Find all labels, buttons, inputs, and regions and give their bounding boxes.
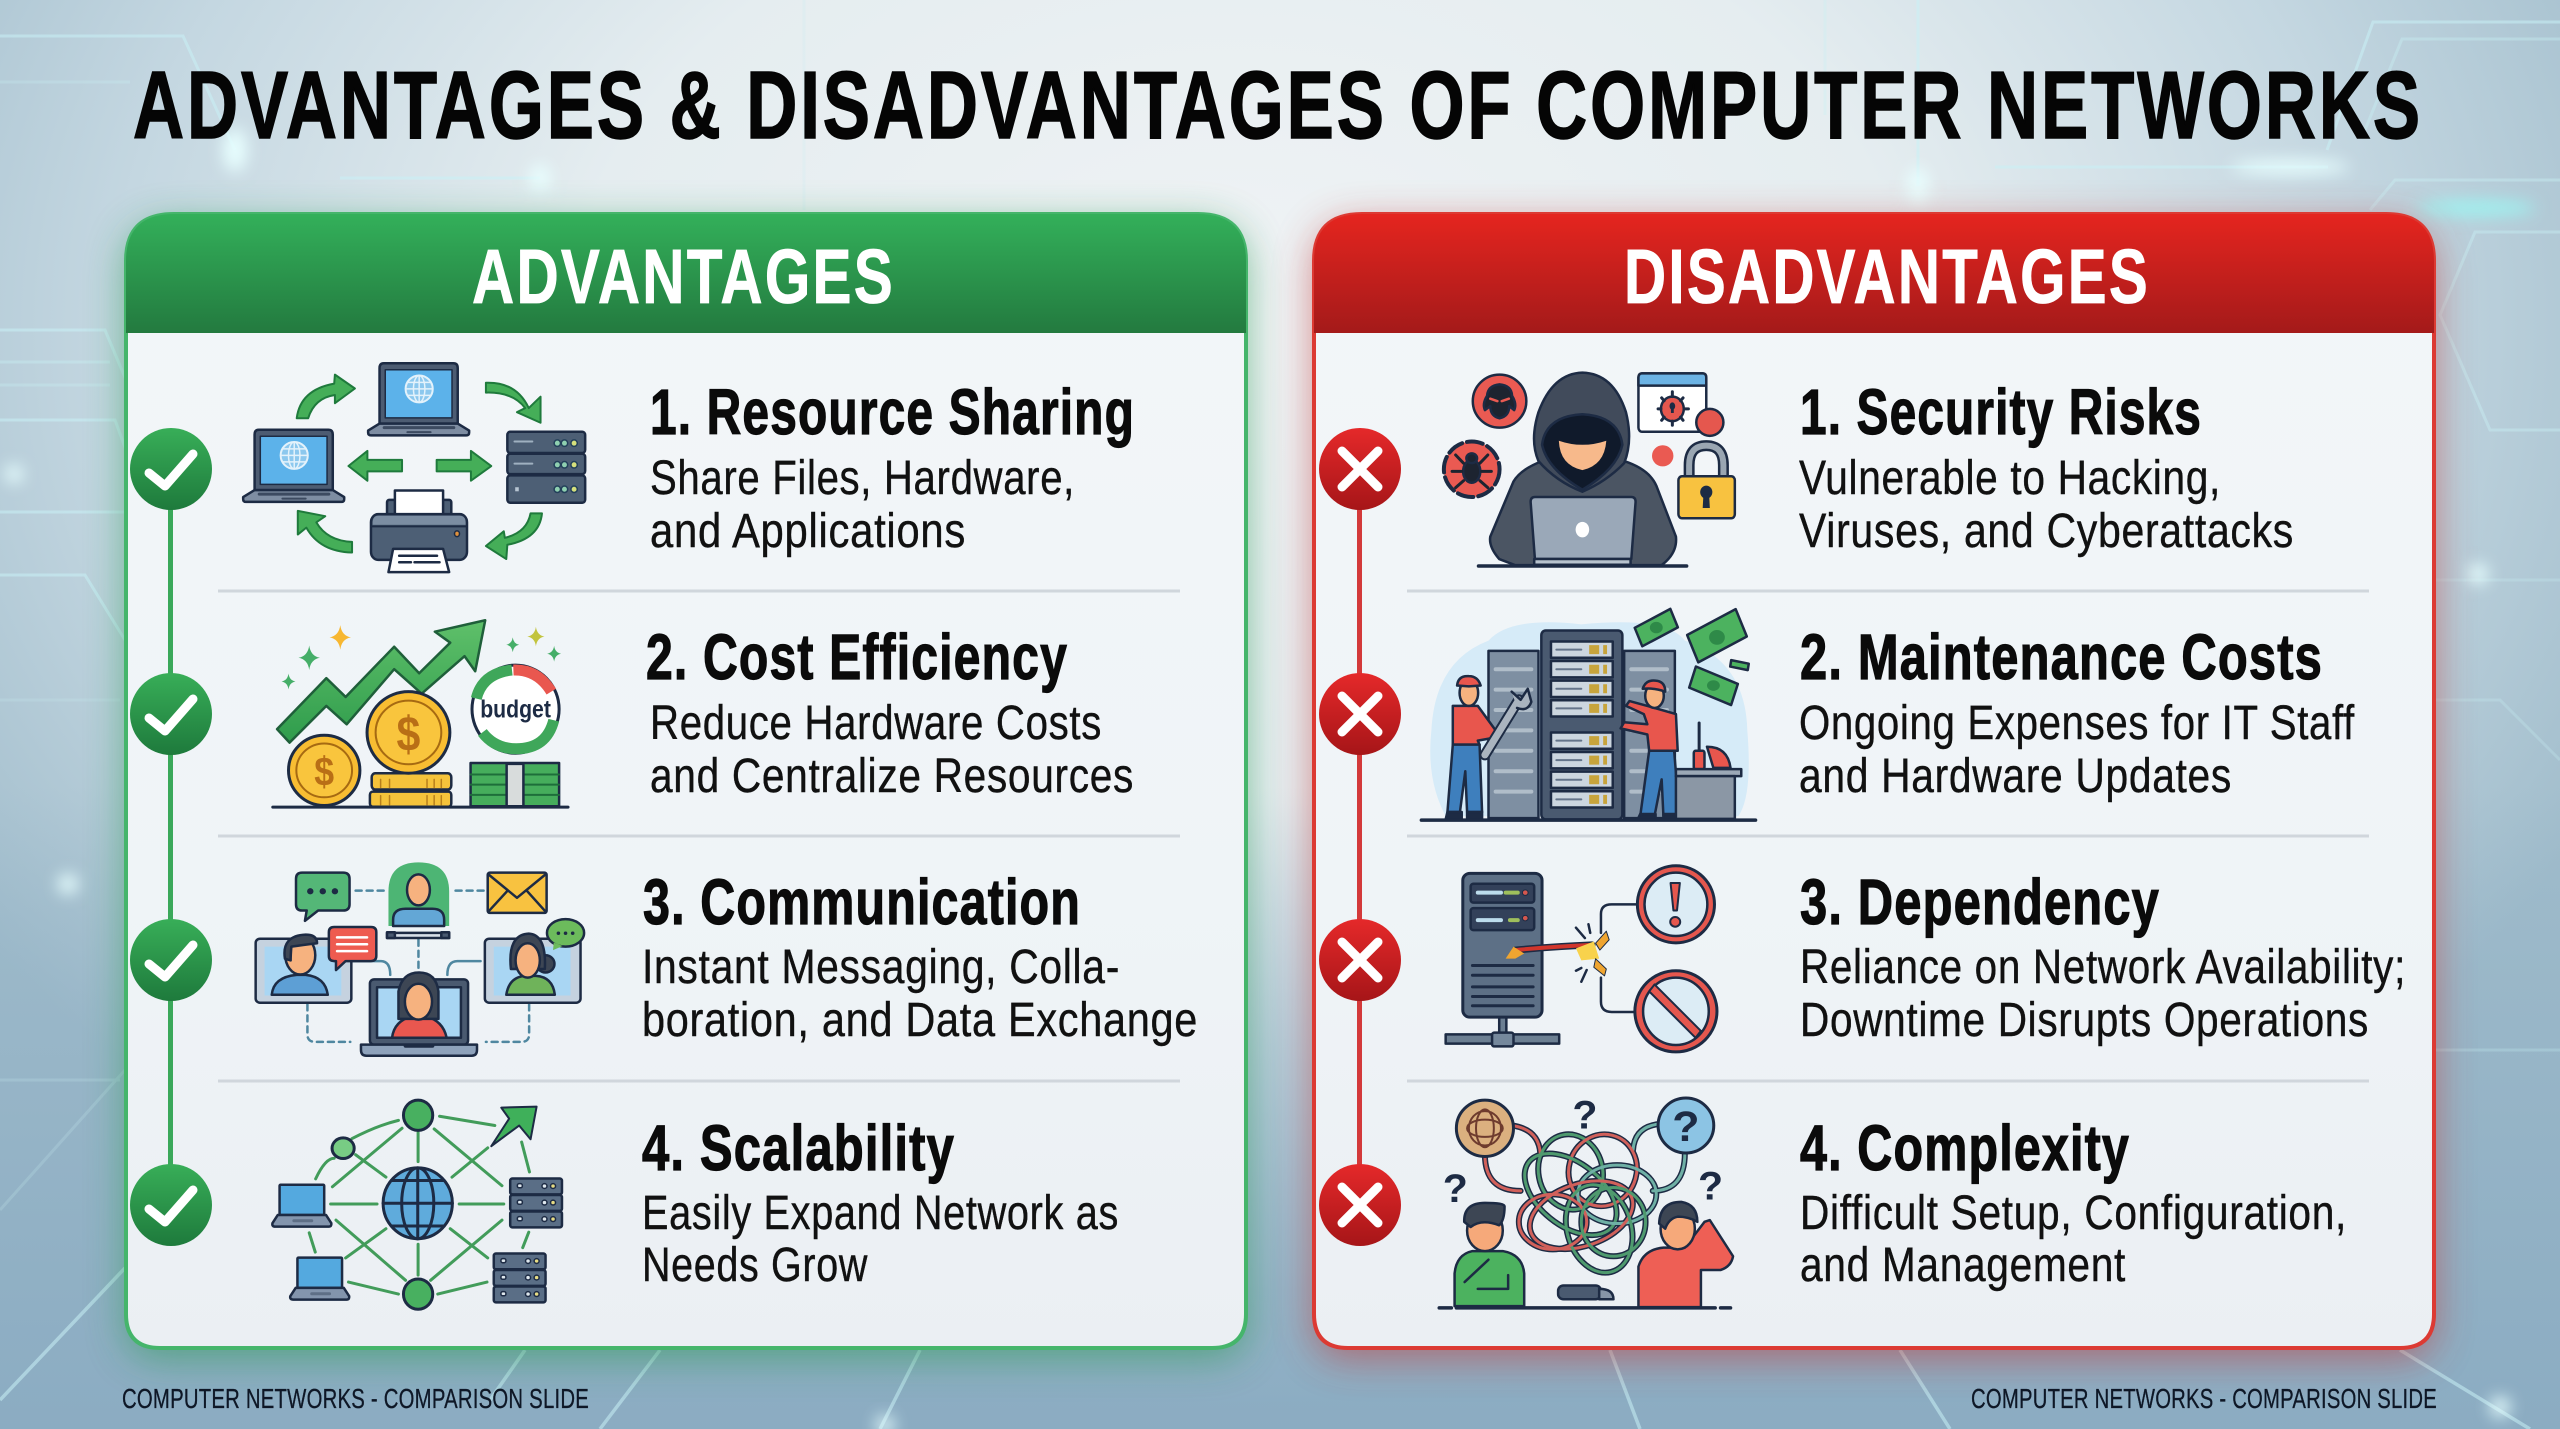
icon: complexity: ? [1572,1093,1597,1137]
item 3 text: communication: 3. Communication [643,866,1081,938]
item 2 text: maintenance costs [1799,621,2355,803]
item 1 text: security risks: 1. Security Risks [1800,376,2202,448]
item 3 text: communication: Instant Messaging, Colla- [642,941,1120,994]
check badge 3 [130,919,212,1001]
icon: complexity: ? [1443,1167,1468,1211]
item 4 text: complexity: 4. Complexity [1800,1112,2130,1184]
cross badge 1 [1319,428,1401,510]
cross badge 2 [1319,673,1401,755]
icon: complexity: ? [1672,1103,1700,1151]
item 1 text: security risks: Viruses, and Cyberattacks [1799,505,2294,558]
item 3 text: dependency: Reliance on Network Availability; [1800,941,2406,994]
item 4 text: complexity: Difficult Setup, Configuration, [1800,1187,2347,1240]
icon: dependency [1446,866,1717,1052]
icon: maintenance costs [1421,609,1756,820]
item 2 text: cost efficiency: Reduce Hardware Costs [650,697,1102,750]
item 1 text: resource sharing: 1. Resource Sharing [650,376,1135,448]
item 4 text: scalability: Needs Grow [642,1239,868,1292]
item 3 text: communication [642,866,1198,1047]
item 4 text: scalability: Easily Expand Network as [642,1187,1119,1240]
timeline: check marks [130,428,212,1246]
footer left: COMPUTER NETWORKS - COMPARISON SLIDE [122,1383,589,1414]
panel header: advantages [126,214,1246,333]
item 2 text: maintenance costs: Ongoing Expenses for IT Staff [1799,697,2355,750]
item 1 text: security risks: Vulnerable to Hacking, [1799,452,2221,505]
icon: resource sharing [243,363,585,572]
panel header: disadvantages [1314,214,2434,333]
item 4 text: complexity [1800,1112,2347,1292]
icon: complexity [1439,1093,1733,1308]
panel header: disadvantages: DISADVANTAGES [1624,234,2150,320]
check badge 2 [130,673,212,755]
item 3 text: dependency: 3. Dependency [1800,866,2160,938]
item 1 text: resource sharing: and Applications [650,505,966,558]
cross badge 3 [1319,919,1401,1001]
item 2 text: cost efficiency [646,621,1134,803]
check badge 4 [130,1164,212,1246]
check badge 1 [130,428,212,510]
item 2 text: maintenance costs: 2. Maintenance Costs [1800,621,2323,693]
item 2 text: maintenance costs: and Hardware Updates [1799,750,2232,803]
panel: disadvantages [1314,214,2434,1358]
item 3 text: communication: boration, and Data Exchange [642,994,1198,1047]
item 4 text: scalability [642,1112,1119,1292]
icon: complexity: ? [1698,1164,1723,1208]
icon: cost efficiency: $ [397,706,420,761]
panel: advantages [126,214,1246,1358]
icon: communication [256,862,584,1056]
icon: cost efficiency: $ [314,749,334,795]
timeline: cross marks [1319,428,1401,1246]
item 2 text: cost efficiency: and Centralize Resources [650,750,1134,803]
item 4 text: scalability: 4. Scalability [642,1112,955,1184]
item 3 text: dependency [1800,866,2406,1047]
icon: security risks [1444,373,1735,566]
item 3 text: dependency: Downtime Disrupts Operations [1800,994,2369,1047]
item 1 text: resource sharing [650,376,1135,558]
icon: cost efficiency: budget [480,695,551,724]
item 2 text: cost efficiency: 2. Cost Efficiency [646,621,1068,693]
item 1 text: resource sharing: Share Files, Hardware, [650,452,1075,505]
icon: scalability [272,1100,562,1309]
panel header: advantages: ADVANTAGES [472,234,895,320]
icon: cost efficiency [273,620,568,807]
item 4 text: complexity: and Management [1800,1239,2126,1292]
item 1 text: security risks [1799,376,2294,558]
cross badge 4 [1319,1164,1401,1246]
